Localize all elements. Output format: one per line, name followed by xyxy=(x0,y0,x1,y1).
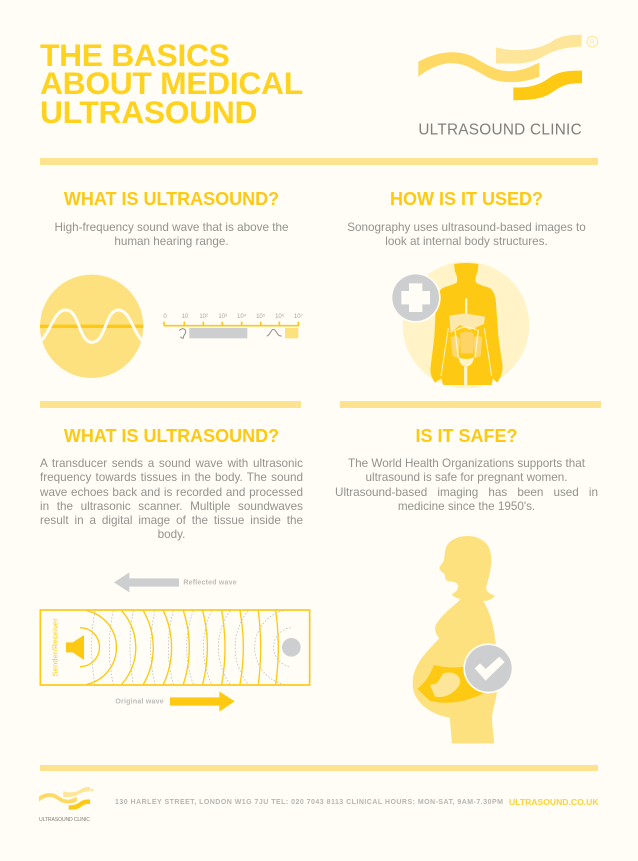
title: ULTRASOUND xyxy=(40,94,257,130)
original wave arrow xyxy=(115,691,235,712)
torso silhouette xyxy=(430,263,503,385)
heading: what is ultrasound: WHAT IS ULTRASOUND? xyxy=(64,189,279,209)
chart: frequency scale: 10⁵ xyxy=(256,313,266,320)
original solid arcs xyxy=(80,611,278,684)
divider: bottom xyxy=(40,765,598,771)
text: transducer: in the ultrasonic scanner. Multiple soundwaves xyxy=(40,500,303,513)
chart: frequency scale xyxy=(163,313,303,339)
logo: footer: ULTRASOUND CLINIC xyxy=(39,817,90,823)
chart: frequency scale: 10⁷ xyxy=(294,313,303,320)
text: transducer: A transducer sends a sound wave with ultrasonic xyxy=(40,457,303,470)
text: ultrasound definition: human hearing range. xyxy=(114,235,229,248)
reflected wave arrow xyxy=(114,572,237,592)
heading: what is ultrasound second: WHAT IS ULTRASOUND? xyxy=(64,426,279,446)
original wave arrow: Original wave xyxy=(115,699,164,706)
text: sonography: look at internal body structures. xyxy=(385,235,548,248)
text: ultrasound definition xyxy=(55,221,288,248)
sender label: Sender/Receiver xyxy=(50,618,59,676)
illustration: pregnant woman xyxy=(412,536,512,744)
logo: ultrasound clinic xyxy=(418,34,598,138)
divider: middle left xyxy=(40,401,301,408)
text: transducer: frequency towards tissues in the body. The sound xyxy=(40,471,303,484)
text: safety: Ultrasound-based imaging has been used in xyxy=(335,486,598,499)
text: transducer: wave echoes back and is recorded and processed xyxy=(40,486,303,499)
text: safety: medicine since the 1950's. xyxy=(398,500,535,513)
text: sonography: Sonography uses ultrasound-based images to xyxy=(347,221,586,234)
title: ABOUT MEDICAL xyxy=(40,65,303,101)
text: ultrasound definition: High-frequency sound wave that is above the xyxy=(55,221,288,234)
divider: middle right xyxy=(340,401,601,408)
wave box xyxy=(40,610,310,685)
heading: is it safe: IS IT SAFE? xyxy=(415,426,518,446)
text: safety: The World Health Organizations supports that xyxy=(348,457,585,470)
logo: ultrasound clinic: ULTRASOUND CLINIC xyxy=(418,121,582,138)
chart: frequency scale: 10⁴ xyxy=(237,313,247,320)
text: safety xyxy=(335,457,598,513)
text: transducer: result in a digital image of the tissue inside the xyxy=(40,514,303,527)
fetus xyxy=(430,672,460,697)
divider: top xyxy=(40,158,598,165)
chart: frequency scale: 10² xyxy=(199,314,208,320)
plus badge xyxy=(391,273,441,323)
illustration: body with plus icon xyxy=(392,262,530,388)
diagram: sound waves xyxy=(40,572,310,712)
reflected wave arrow: Reflected wave xyxy=(183,580,237,587)
speaker icon xyxy=(66,635,84,660)
chart: frequency scale: 10 xyxy=(182,314,189,320)
chart: frequency scale: 10⁶ xyxy=(275,313,285,320)
heading: how is it used: HOW IS IT USED? xyxy=(390,189,543,209)
silhouette xyxy=(413,536,497,743)
text: sonography xyxy=(347,221,586,248)
chart: frequency scale: 0 xyxy=(163,314,167,320)
title: THE BASICS xyxy=(40,37,230,73)
footer: address: 130 HARLEY STREET, LONDON W1G 7JU TEL: 020 7043 8113 CLINICAL HOURS: MON-SAT, 9AM-7.30PM xyxy=(115,799,503,806)
text: transducer xyxy=(40,457,303,541)
check badge xyxy=(463,643,513,693)
reflector xyxy=(282,638,301,657)
text: safety: ultrasound is safe for pregnant women. xyxy=(365,471,568,484)
footer: website: ULTRASOUND.CO.UK xyxy=(509,797,599,807)
ultrasound scan xyxy=(417,665,483,703)
chart: frequency scale: 10³ xyxy=(218,314,227,320)
reflected dashed arcs xyxy=(92,611,291,684)
logo: footer xyxy=(39,787,94,823)
organs xyxy=(441,298,492,376)
title xyxy=(40,37,303,130)
text: transducer: body. xyxy=(158,528,185,541)
icon: sound wave circle xyxy=(40,274,144,378)
logo: ultrasound clinic: R xyxy=(590,39,595,46)
